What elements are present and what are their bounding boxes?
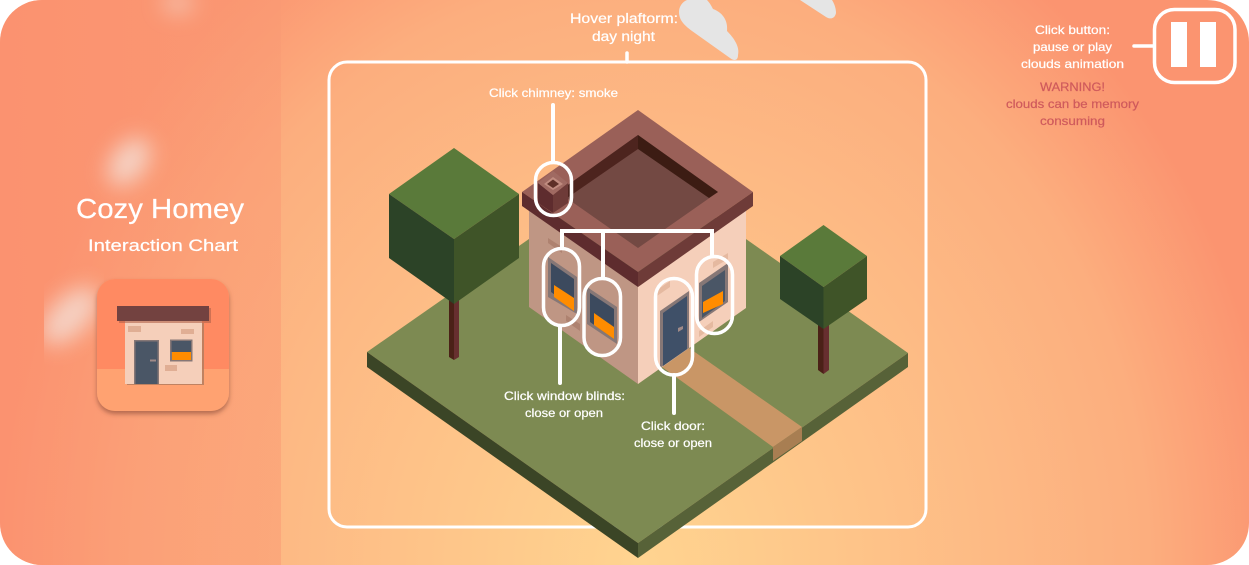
wall right (638, 205, 746, 384)
connector: windows (562, 231, 712, 278)
connector: chimney (551, 105, 555, 162)
platform right side (638, 353, 908, 558)
platform left side (367, 352, 638, 558)
chimney (538, 171, 568, 213)
bricks (548, 238, 728, 337)
wall left (529, 205, 638, 384)
hover label: day night (592, 29, 655, 44)
warning text: clouds can be memory (1006, 97, 1139, 111)
cloud: right (800, 0, 836, 18)
cloud: left (679, 0, 738, 60)
label: window blinds (504, 389, 625, 420)
sidebar title: Cozy Homey (76, 193, 244, 224)
label: window blinds: Click window blinds: (504, 389, 625, 403)
sidebar subtitle: Interaction Chart (88, 237, 239, 255)
button: pause (1154, 10, 1235, 82)
label: pause button (1021, 23, 1124, 71)
label: pause button: Click button: (1035, 23, 1110, 37)
connector: blinds (558, 326, 562, 383)
warning text (1006, 80, 1139, 128)
tree: right (780, 225, 867, 374)
icon: house app icon (97, 279, 229, 411)
window: left 1 (548, 257, 577, 314)
label: window blinds: close or open (525, 406, 603, 420)
label: pause button: pause or play (1033, 40, 1112, 54)
hover label (570, 11, 678, 44)
house (522, 110, 753, 384)
warning text: consuming (1040, 114, 1105, 128)
path edge (773, 427, 802, 461)
label: door: close or open (634, 436, 712, 450)
frame: platform highlight (329, 62, 926, 527)
hover label: Hover plaftorm: (570, 11, 678, 26)
roof (522, 110, 753, 287)
connector: door (672, 375, 676, 413)
blurred cloud: middle (99, 130, 159, 194)
clouds (679, 0, 836, 60)
label: pause button: clouds animation (1021, 57, 1124, 71)
label: door: Click door: (641, 419, 705, 433)
label: door (634, 419, 712, 450)
blurred cloud: lower (44, 276, 102, 356)
hover connector (625, 53, 629, 62)
callouts (536, 105, 732, 413)
window: left 2 (587, 287, 617, 344)
path (662, 348, 802, 447)
window: right (699, 263, 728, 322)
door (660, 291, 689, 368)
warning text: WARNING! (1040, 80, 1105, 94)
outline: window 2 (584, 278, 620, 356)
platform (367, 163, 908, 558)
outline: window 1 (544, 248, 580, 326)
connector: button (1134, 44, 1154, 48)
outline: window right (696, 256, 732, 334)
roof recess (558, 135, 718, 248)
outline: door (656, 278, 692, 375)
grass top (367, 163, 908, 543)
label: chimney: Click chimney: smoke (489, 86, 618, 100)
tree: left (389, 148, 519, 360)
outline: chimney (536, 162, 572, 216)
blurred cloud: top (162, 0, 194, 14)
panel: sidebar (0, 0, 281, 565)
